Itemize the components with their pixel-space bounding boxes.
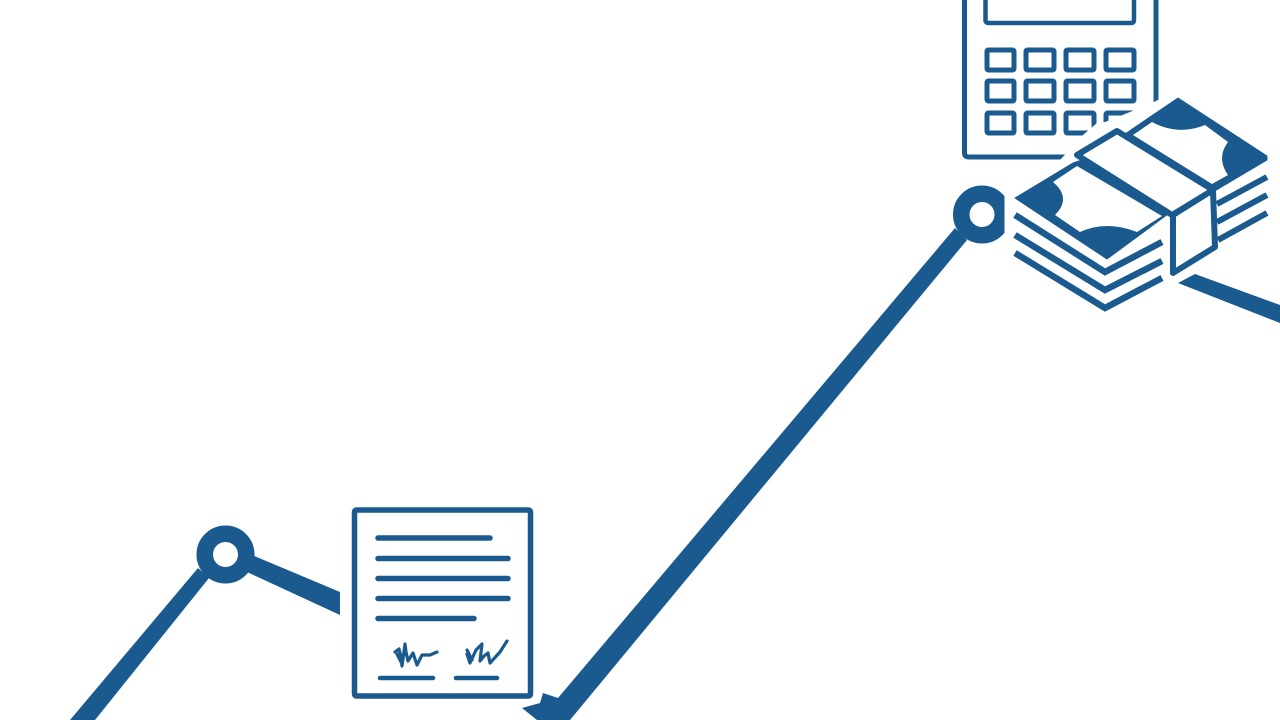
back bundle top note (1125, 98, 1267, 192)
back bundle edge layers (1217, 177, 1267, 240)
paper band (1077, 131, 1215, 273)
front bundle edge layers (1015, 215, 1162, 308)
calculator body (964, 0, 1156, 157)
icon: left chart node (205, 534, 246, 575)
calculator keys (987, 50, 1134, 133)
icon: calculator (964, 0, 1156, 157)
white backing for the banknotes (1004, 88, 1280, 320)
arrow: rising trend line (70, 228, 1280, 720)
calculator screen (986, 0, 1134, 23)
signature marks (395, 641, 507, 666)
icon: upper chart node (961, 194, 1003, 235)
icon: stack of banknotes (1004, 88, 1280, 320)
icon: signed contract document (354, 510, 530, 696)
front bundle top note (1015, 160, 1168, 259)
